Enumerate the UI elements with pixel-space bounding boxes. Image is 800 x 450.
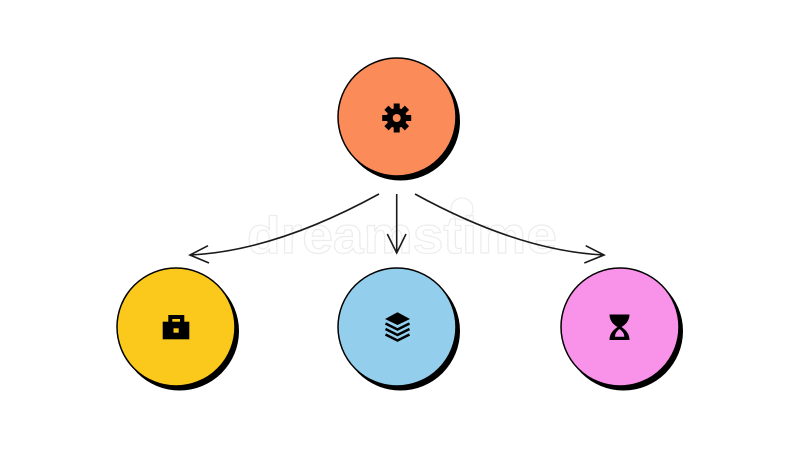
icon: hourglass — [610, 314, 630, 340]
icon: briefcase — [163, 315, 189, 339]
arrow: to left node — [190, 194, 379, 263]
node: middle blue layers — [338, 268, 460, 390]
node: top orange gear — [338, 58, 460, 180]
node: left yellow briefcase — [117, 268, 239, 390]
icon: layers — [385, 312, 410, 340]
arrow: to right node — [415, 194, 604, 263]
watermark: dreamstime — [247, 207, 557, 265]
node: right pink hourglass — [561, 268, 683, 390]
arrow: to middle node — [387, 194, 406, 253]
icon: gear — [382, 104, 411, 132]
